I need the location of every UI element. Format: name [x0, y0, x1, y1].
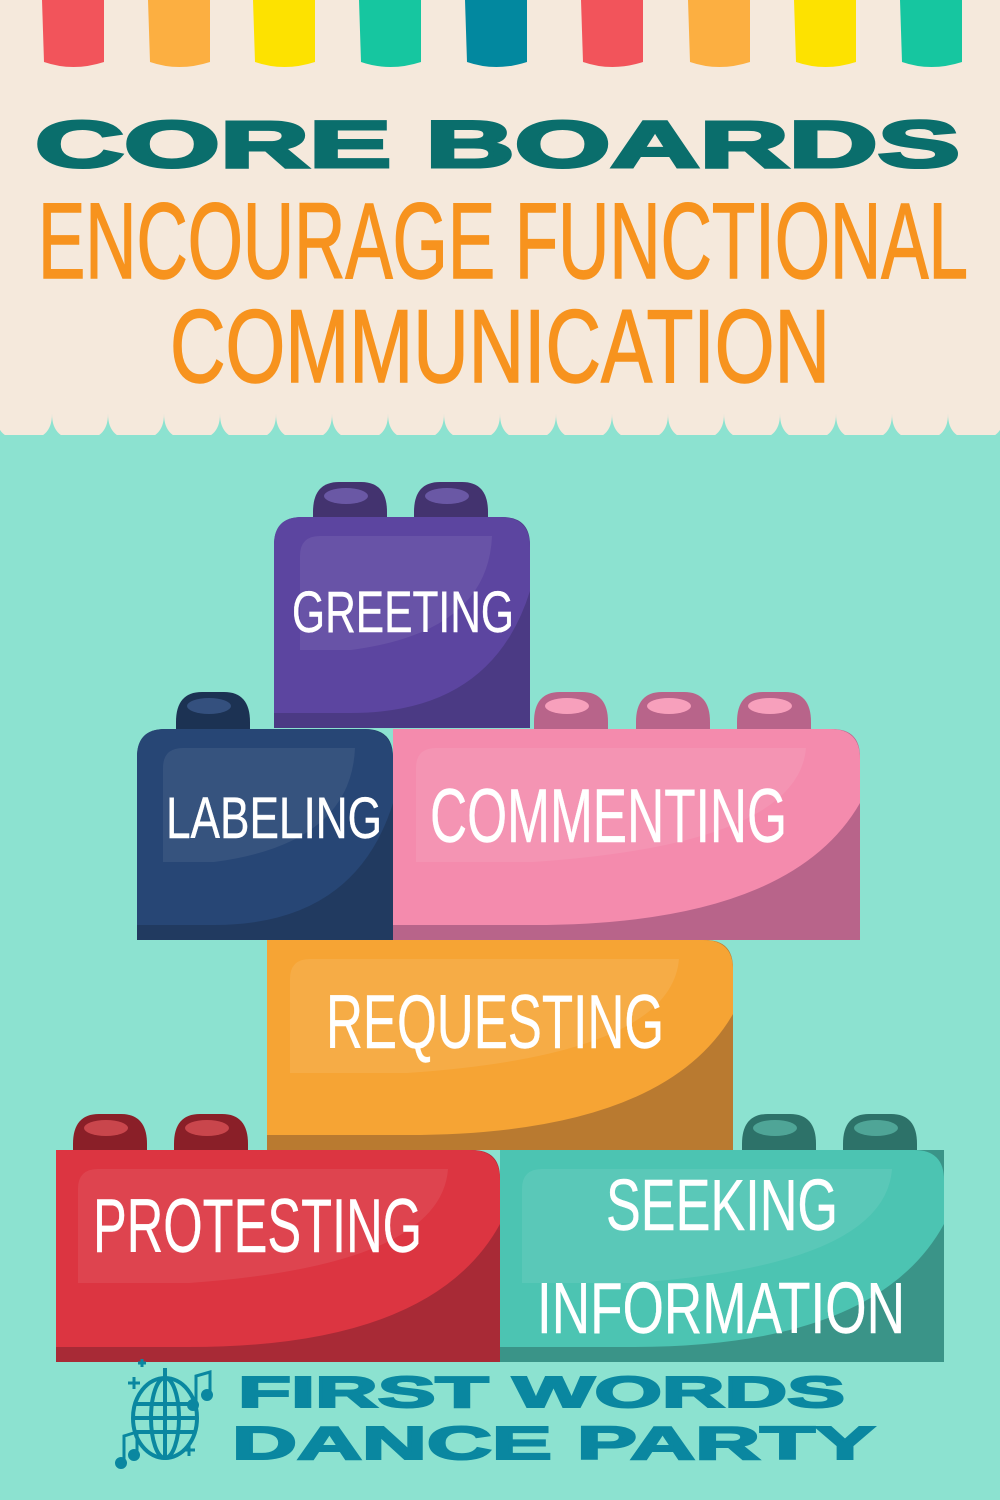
decorative stripes [42, 0, 962, 67]
brick: greeting [274, 482, 530, 728]
title: CORE BOARDS: CORE BOARDS [35, 107, 960, 181]
logo text: FIRST WORDS [238, 1368, 845, 1417]
brick: commenting [393, 692, 860, 940]
label: COMMENTING: COMMENTING [430, 774, 787, 859]
brick: labeling [137, 692, 393, 940]
header background [0, 0, 1000, 435]
label: LABELING: LABELING [166, 786, 382, 851]
logo text: DANCE PARTY [232, 1417, 875, 1469]
label: GREETING: GREETING [292, 580, 514, 645]
brick: protesting [56, 1114, 500, 1362]
logo text [232, 1368, 875, 1469]
brick: requesting [267, 940, 733, 1150]
label: SEEKING INFORMATION [537, 1166, 905, 1349]
logo: disco globe icon [117, 1359, 211, 1467]
label: PROTESTING: PROTESTING [93, 1184, 422, 1269]
label: SEEKING INFORMATION: SEEKING [606, 1166, 838, 1246]
label: REQUESTING: REQUESTING [326, 980, 664, 1065]
brick: seeking information [500, 1114, 944, 1362]
